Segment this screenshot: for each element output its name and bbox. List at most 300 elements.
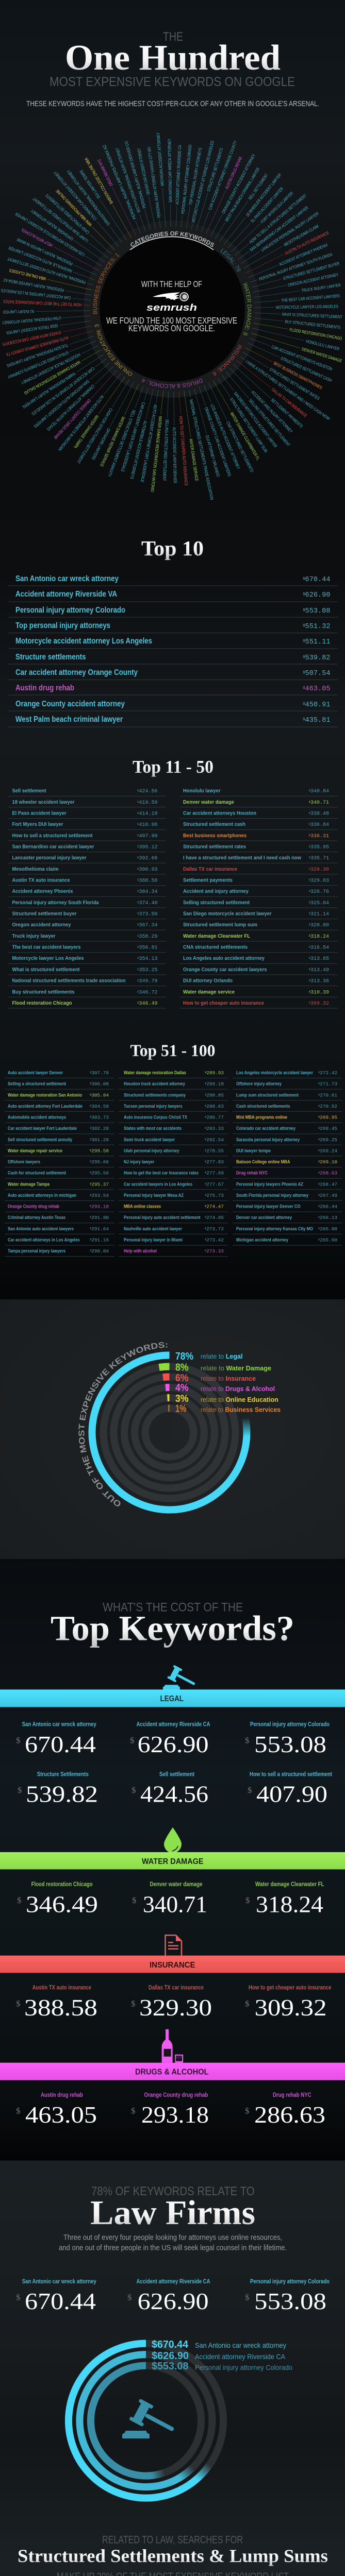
- keywords and prices: $336.84: [309, 822, 329, 828]
- keywords and prices: CNA structured settlements: [183, 944, 248, 951]
- keyword values: Structure Settlements: [37, 1771, 89, 1777]
- keywords and prices: $353.25: [137, 968, 158, 973]
- keywords and prices: Sell structured settlement annuity: [8, 1137, 73, 1143]
- keywords and prices: $291.16: [90, 1238, 109, 1243]
- keywords: Accident attorney Riverside VA: [15, 590, 117, 599]
- keywords and prices: $326.76: [309, 889, 329, 895]
- keywords and prices: $358.29: [137, 934, 158, 940]
- keyword rays: PERSONAL INJURY LAWYERS PHOENIX AZ: [102, 144, 137, 220]
- keyword rays: MBA ONLINE CLASSES: [8, 268, 46, 281]
- prices: $551.11: [303, 638, 330, 646]
- keywords and prices: Buy structured settlements: [12, 989, 75, 995]
- keyword rays: AUSTIN TX AUTO INSURANCE: [284, 230, 330, 256]
- category label: drugs and alcohol: DRUGS & ALCOHOL: 4: [142, 378, 203, 388]
- keywords and prices: South Florida personal injury attorney: [236, 1193, 309, 1198]
- keywords and prices: $354.13: [137, 956, 158, 962]
- keyword rays: MICHIGAN ACCIDENT ATTORNEY: [155, 132, 165, 186]
- keyword values: [16, 1722, 332, 1807]
- found line two: KEYWORDS ON GOOGLE.: [128, 323, 215, 333]
- keywords and prices: How to get cheaper auto insurance: [183, 1000, 264, 1006]
- keywords and prices: $338.48: [309, 811, 329, 817]
- banner text: DRUGS & ALCOHOL: [135, 2068, 208, 2076]
- keywords and prices: Drug rehab NYC: [236, 1171, 268, 1176]
- keywords and prices: $277.69: [205, 1171, 224, 1176]
- keywords and prices: Selling structured settlement: [183, 900, 250, 906]
- keywords and prices: Sell settlement: [12, 788, 46, 794]
- centre text block: [106, 279, 237, 333]
- keyword rays: WATER DAMAGE RESTORATION SAN ANTONIO: [150, 416, 163, 493]
- keyword rays: AUTO ACCIDENT ATTORNEYS IN MICHIGAN: [57, 394, 105, 452]
- keyword rays: CASH STRUCTURED SETTLEMENTS: [44, 193, 90, 235]
- legend: 8%: [175, 1362, 189, 1374]
- keywords and prices: [236, 1070, 337, 1243]
- keyword values: 539.82: [26, 1781, 98, 1807]
- keywords and prices: Structured settlements company: [124, 1092, 186, 1098]
- keyword rays: CNA STRUCTURED SETTLEMENTS: [225, 420, 255, 473]
- icon: water drop: [164, 1827, 182, 1853]
- keywords and prices: Personal injury attorney Kansas City MO: [236, 1226, 313, 1232]
- kicker: WHAT'S THE COST OF THE: [103, 1600, 243, 1615]
- keywords and prices: Houston truck accident attorney: [124, 1081, 186, 1087]
- keyword rays: WATER DAMAGE TAMPA: [73, 414, 100, 450]
- title: Structured Settlements & Lump Sums: [18, 2546, 328, 2566]
- legend: 78%: [175, 1351, 193, 1362]
- banner text: LEGAL: [160, 1694, 184, 1703]
- keyword values: $: [131, 2106, 136, 2115]
- arc: middle fade: [180, 2468, 193, 2478]
- keywords and prices: NJ injury lawyer: [124, 1159, 154, 1165]
- keyword values: $: [245, 2106, 250, 2115]
- keyword values: 329.30: [139, 1994, 212, 2021]
- keyword rays: SELL STRUCTURED SETTLEMENT ANNUITY: [107, 409, 137, 478]
- keyword values: $: [16, 1735, 21, 1745]
- keywords and prices: $291.64: [90, 1226, 109, 1232]
- panel: law firms background: [0, 2161, 345, 2576]
- keywords and prices: Honolulu lawyer: [183, 788, 221, 794]
- legend: relate to Business Services: [201, 1405, 281, 1414]
- keywords and prices: Los Angeles motorcycle accident lawyer: [236, 1070, 313, 1076]
- keywords and prices: $282.54: [205, 1137, 224, 1143]
- keyword rays: DRUG REHAB NYC: [96, 158, 114, 187]
- legend: 4%: [175, 1382, 189, 1394]
- keywords and prices: $268.63: [318, 1171, 337, 1176]
- ring labels: Accident attorney Riverside CA: [195, 2352, 286, 2361]
- keyword values: $: [131, 1998, 136, 2008]
- keyword rays: ACCIDENT ATTORNEY PHOENIX: [278, 242, 328, 267]
- arc: drugs and alcohol: [166, 1384, 169, 1391]
- keywords and prices: I have a structured settlement and I need cash now: [183, 855, 302, 861]
- category: drugs and alcohol: [0, 2029, 345, 2128]
- keywords and prices: Personal injury lawyer Denver CO: [236, 1204, 301, 1210]
- keywords and prices: Settlement payments: [183, 877, 233, 884]
- keyword values: 286.63: [254, 2102, 325, 2128]
- keyword values: Dallas TX car insurance: [149, 1985, 204, 1991]
- keyword rays: OFFSHORE LAWYERS: [91, 427, 111, 461]
- keywords and prices: $407.90: [137, 834, 158, 839]
- kicker: RELATED TO LAW, SEARCHES FOR: [102, 2534, 243, 2546]
- keywords and prices: $289.18: [205, 1081, 224, 1087]
- heading: top 51-100: Top 51 - 100: [130, 1042, 216, 1060]
- stats: law firm keyword values: $: [245, 2293, 250, 2302]
- row dividers: [233, 1078, 342, 1245]
- keywords and prices: $424.56: [137, 789, 158, 794]
- keywords and prices: $269.45: [318, 1126, 337, 1131]
- keywords and prices: $269.25: [318, 1137, 337, 1143]
- grey rings: [69, 2344, 223, 2498]
- keywords and prices: $336.31: [309, 834, 329, 839]
- black centre circle: [100, 236, 245, 382]
- keyword rays: LANCASTER PERSONAL INJURY LAWYER: [260, 211, 320, 252]
- keyword values: $: [130, 1735, 135, 1745]
- keywords and prices: Best business smartphones: [183, 833, 247, 839]
- prices: $450.91: [303, 701, 330, 709]
- keywords and prices: $269.95: [318, 1115, 337, 1120]
- arc: legal 78%: [92, 1355, 247, 1510]
- keywords and prices: $277.67: [205, 1181, 224, 1187]
- keyword rays: NATIONAL STRUCTURED SETTLEMENTS TRADE ASSOCIATION: [189, 399, 215, 500]
- keywords and prices: $273.72: [205, 1226, 224, 1232]
- stats: law firm keyword values: 670.44: [25, 2288, 96, 2314]
- keywords and prices: $419.59: [137, 800, 158, 806]
- keywords and prices: $306.08: [90, 1081, 109, 1087]
- keywords and prices: Car accident attorneys Houston: [183, 810, 256, 816]
- keyword rays: CRIMINAL ATTORNEY AUSTIN TEXAS: [46, 383, 96, 432]
- keywords and prices: $367.34: [137, 923, 158, 928]
- keywords: Motorcycle accident attorney Los Angeles: [15, 637, 152, 646]
- keywords and prices: Cash for structured settlement: [8, 1171, 67, 1176]
- keywords: Personal injury attorney Colorado: [15, 606, 125, 615]
- keywords and prices: $390.93: [137, 867, 158, 873]
- ring labels: $626.90: [152, 2350, 189, 2362]
- keywords and prices: $283.33: [205, 1126, 224, 1131]
- keywords and prices: $293.54: [90, 1193, 109, 1198]
- keyword rays: MESOTHELIOMA CLAIM: [283, 224, 319, 247]
- keywords and prices: Auto accident attorney Fort Lauderdale: [8, 1104, 83, 1109]
- keywords and prices: $313.36: [309, 978, 329, 985]
- keyword values: 670.44: [25, 1731, 96, 1757]
- keywords and prices: DUI attorney Orlando: [183, 978, 233, 984]
- keywords and prices: $313.85: [309, 956, 329, 962]
- table: top 10: [8, 574, 338, 727]
- prices: $670.44: [303, 576, 330, 584]
- prices: $463.05: [303, 685, 330, 693]
- keywords and prices: [12, 788, 158, 1007]
- keywords and prices: $384.34: [137, 889, 158, 895]
- keyword rays: HOW TO GET CHEAPER AUTO INSURANCE: [178, 416, 189, 486]
- keyword rays: AUTOMOBILE ACCIDENT ATTORNEYS: [129, 420, 148, 480]
- ring labels: $670.44: [152, 2339, 189, 2350]
- keywords and prices: San Bernardino car accident lawyer: [12, 844, 94, 850]
- keywords and prices: Utah personal injury attorney: [124, 1148, 179, 1154]
- keywords and prices: $273.42: [205, 1238, 224, 1243]
- keywords and prices: $277.83: [205, 1159, 224, 1165]
- keywords and prices: $313.49: [309, 968, 329, 973]
- icon: gavel: [163, 1665, 199, 1691]
- keywords and prices: $309.32: [309, 1001, 329, 1007]
- keyword rays: ORANGE COUNTY DRUG REHAB: [53, 398, 92, 440]
- keyword values: $: [16, 2106, 21, 2115]
- stats: law firm keyword values: 626.90: [138, 2288, 209, 2314]
- keywords and prices: $414.18: [137, 811, 158, 817]
- keyword rays: DALLAS TX CAR INSURANCE: [271, 387, 308, 418]
- keywords and prices: Water damage restoration San Antonio: [8, 1092, 82, 1098]
- keywords and prices: Personal injury lawyers Phoenix AZ: [236, 1181, 303, 1187]
- keyword rays: MINI MBA PROGRAMS ONLINE: [55, 188, 93, 227]
- panel: top keywords cost background: [0, 1559, 345, 2161]
- legend: 6%: [175, 1372, 189, 1384]
- keyword rays: HELP WITH ALCOHOL: [20, 227, 54, 248]
- keyword values: $: [245, 1895, 250, 1905]
- keyword rays: COLORADO CAR ACCIDENT ATTORNEY: [53, 170, 97, 222]
- banner: water damage: [0, 1852, 345, 1869]
- keywords and prices: Car accident lawyers in Los Angeles: [124, 1181, 192, 1187]
- keywords and prices: $289.93: [205, 1070, 224, 1076]
- keywords and prices: Help with alcohol: [124, 1248, 157, 1254]
- keywords and prices: El Paso accident lawyer: [12, 810, 66, 816]
- keywords and prices: Auto insurance Corpus Christi TX: [124, 1115, 187, 1120]
- table: top 11-50 right column: [179, 788, 338, 1008]
- keyword values: Sell settlement: [159, 1771, 194, 1777]
- keywords and prices: Tampa personal injury lawyers: [8, 1248, 65, 1254]
- prices: $553.08: [303, 607, 330, 615]
- row dividers: [8, 586, 338, 727]
- keywords and prices: $272.42: [318, 1070, 337, 1076]
- keywords and prices: $325.04: [309, 901, 329, 906]
- keywords and prices: $329.03: [309, 878, 329, 884]
- keyword rays: EL PASO ACCIDENT LAWYER: [250, 186, 284, 224]
- keywords and prices: Cash structured settlements: [236, 1104, 290, 1109]
- category: legal: [0, 1665, 345, 1807]
- keywords and prices: Water damage service: [183, 989, 235, 995]
- keywords and prices: Sarasota personal injury attorney: [236, 1137, 300, 1143]
- text block: law firms paragraph: and one out of three people in the US will seek legal counsel in their lifetime.: [59, 2243, 287, 2252]
- keywords and prices: Lump sum structured settlement: [236, 1092, 299, 1098]
- keywords and prices: $288.85: [205, 1092, 224, 1098]
- keyword rays: SAN ANTONIO AUTO ACCIDENT LAWYERS: [32, 379, 91, 429]
- keyword values: 463.05: [25, 2102, 97, 2128]
- keyword rays: TAMPA PERSONAL INJURY LAWYERS: [21, 371, 77, 410]
- category label: legal: LEGAL: 78: [221, 248, 241, 272]
- keyword rays: [1, 132, 343, 500]
- keywords and prices: Denver water damage: [183, 799, 234, 805]
- keywords and prices: $270.52: [318, 1104, 337, 1109]
- keywords and prices: $295.66: [90, 1159, 109, 1165]
- text block: law firms paragraph: [59, 2233, 287, 2252]
- keywords and prices: $274.47: [205, 1204, 224, 1210]
- keyword values: 293.18: [141, 2102, 209, 2128]
- keywords and prices: Personal injury lawyer in Miami: [124, 1238, 183, 1243]
- legend: relate to Drugs & Alcohol: [201, 1385, 275, 1393]
- keywords and prices: $335.71: [309, 856, 329, 861]
- keywords and prices: Car accident attorneys in Los Angeles: [8, 1238, 79, 1243]
- keywords and prices: $410.96: [137, 822, 158, 828]
- table: top 11-50 left column: [8, 788, 166, 1008]
- keywords and prices: States with most car accidents: [124, 1126, 182, 1131]
- keyword rays: OFFSHORE INJURY ATTORNEY: [29, 208, 74, 242]
- keyword values: Water damage Clearwater FL: [255, 1882, 324, 1888]
- keywords and prices: National structured settlements trade association: [12, 978, 126, 984]
- keyword values: $: [245, 1735, 250, 1745]
- keyword values: 346.49: [26, 1891, 98, 1918]
- keywords: Top personal injury attorneys: [15, 621, 110, 630]
- keyword rays: WEST PALM BEACH CRIMINAL LAWYER: [224, 166, 261, 223]
- keywords and prices: Structured settlement buyer: [12, 911, 76, 917]
- arc: inner fade: [152, 2472, 165, 2476]
- keywords and prices: Orange County car accident lawyers: [183, 967, 267, 973]
- keywords and prices: 18 wheeler accident lawyer: [12, 799, 74, 805]
- keyword rays: BABSON COLLEGE ONLINE MBA: [84, 157, 114, 205]
- keyword rays: SELLING STRUCTURED SETTLEMENT: [248, 398, 291, 447]
- found line one: WE FOUND THE 100 MOST EXPENSIVE: [106, 315, 237, 326]
- keywords: San Antonio car wreck attorney: [15, 574, 119, 583]
- stats: law firm keyword values: San Antonio car wreck attorney: [22, 2279, 96, 2285]
- keywords and prices: $320.80: [309, 923, 329, 928]
- legend: 3%: [175, 1393, 189, 1404]
- keyword values: [16, 1985, 331, 2021]
- keywords and prices: $349.79: [137, 978, 158, 985]
- keywords and prices: $268.47: [318, 1181, 337, 1187]
- keyword rays: PERSONAL INJURY ATTORNEY COLORADO: [180, 144, 193, 214]
- keyword values: $: [17, 1895, 22, 1905]
- keywords and prices: Accident attorney Phoenix: [12, 888, 73, 894]
- arc: outer: [69, 2344, 196, 2498]
- keyword values: Austin TX auto insurance: [32, 1985, 91, 1991]
- heading: top 11-50: Top 11 - 50: [133, 757, 213, 777]
- keywords and prices: $305.84: [90, 1092, 109, 1098]
- keyword values: 626.90: [138, 1731, 209, 1757]
- keywords and prices: Denver car accident attorney: [236, 1215, 292, 1221]
- keywords and prices: Car accident lawyer Fort Lauderdale: [8, 1126, 77, 1131]
- keyword values: [17, 1882, 324, 1918]
- arc: outer fade: [196, 2465, 209, 2479]
- heading: The One Hundred: [26, 30, 319, 108]
- keywords and prices: $269.24: [318, 1148, 337, 1154]
- keywords and prices: Auto accident attorneys in michigan: [8, 1193, 76, 1198]
- keyword rays: BEST BUSINESS SMARTPHONES: [273, 361, 323, 391]
- keywords and prices: [124, 1070, 224, 1254]
- keyword rays: SARASOTA PERSONAL INJURY ATTORNEY: [65, 169, 111, 227]
- keywords and prices: Motorcycle lawyer Los Angeles: [12, 955, 84, 961]
- category: water damage: [0, 1827, 345, 1918]
- keyword rays: WATER DAMAGE RESTORATION DALLAS: [23, 360, 81, 396]
- keywords and prices: What is structured settlement: [12, 967, 80, 973]
- legend: [175, 1351, 281, 1415]
- keyword values: 407.90: [256, 1781, 327, 1807]
- keywords and prices: Mesothelioma claim: [12, 866, 59, 872]
- keyword rays: CAR ACCIDENT ATTORNEYS IN LOS ANGELES: [30, 366, 95, 417]
- keyword rays: STRUCTURED SETTLEMENT RATES: [269, 366, 321, 401]
- keywords and prices: Personal injury attorney South Florida: [12, 900, 99, 906]
- keywords and prices: $303.73: [90, 1115, 109, 1120]
- table: top 51-100 column one: [5, 1070, 114, 1257]
- keyword rays: PERSONAL INJURY LAWYER IN MIAMI: [16, 237, 74, 267]
- keyword values: Flood restoration Chicago: [31, 1882, 93, 1888]
- prices: $435.81: [303, 717, 330, 724]
- heading: law firms: [90, 2184, 255, 2232]
- keywords and prices: Structured settlement rates: [183, 844, 246, 850]
- stats: law firm keyword values: Accident attorney Riverside CA: [136, 2279, 210, 2285]
- keyword rays: SAN ANTONIO CAR WRECK ATTORNEY: [167, 139, 173, 202]
- keywords and prices: Selling a structured settlement: [8, 1081, 67, 1087]
- keywords and prices: $356.81: [137, 945, 158, 951]
- keyword rays: SELL SETTLEMENT: [247, 173, 269, 201]
- keyword rays: AUTO ACCIDENT ATTORNEY FORT LAUDERDALE: [140, 404, 158, 483]
- table: top 51-100 column three: [233, 1070, 342, 1245]
- keyword rays: ACCIDENT ATTORNEY RIVERSIDE CA: [174, 145, 182, 205]
- keywords and prices: Water damage Clearwater FL: [183, 933, 251, 939]
- arc: legal fade: [245, 1418, 247, 1436]
- keywords and prices: Michigan accident attorney: [236, 1238, 289, 1243]
- keyword values: $: [248, 1785, 252, 1795]
- category label: online education: ONLINE EDUCATION: 3: [95, 324, 132, 376]
- keyword rays: CASH FOR STRUCTURED SETTLEMENT: [76, 407, 114, 464]
- stats: law firm keyword values: [16, 2279, 330, 2314]
- keywords and prices: Offshore lawyers: [8, 1159, 40, 1165]
- stats: law firm keyword values: Personal injury attorney Colorado: [250, 2279, 330, 2285]
- keywords and prices: $265.80: [318, 1226, 337, 1232]
- legend: relate to Insurance: [201, 1375, 256, 1382]
- keywords and prices: San Diego motorcycle accident lawyer: [183, 911, 271, 917]
- chart: category share rings: [78, 1342, 281, 1514]
- keywords: West Palm beach criminal lawyer: [15, 715, 123, 724]
- keywords and prices: Austin TX auto insurance: [12, 877, 70, 884]
- banner: legal: [0, 1689, 345, 1707]
- banner text: WATER DAMAGE: [142, 1857, 204, 1866]
- stats: law firm keyword values: $: [16, 2293, 21, 2302]
- chart: law firm rings: [69, 2339, 292, 2498]
- keywords and prices: $373.50: [137, 911, 158, 918]
- panel: category share section background: [0, 1299, 345, 1559]
- keywords and prices: Water damage Tampa: [8, 1181, 50, 1187]
- banner text: INSURANCE: [150, 1961, 195, 1970]
- keyword rays: STRUCTURED SETTLEMENT LUMP SUM: [229, 397, 269, 453]
- keywords and prices: Oregon accident attorney: [12, 922, 71, 928]
- keyword rays: CAR ACCIDENT LAWYER FORT LAUDERDALE: [120, 401, 146, 472]
- keywords and prices: Auto accident lawyer Denver: [8, 1070, 63, 1076]
- keyword values: Austin drug rehab: [41, 2092, 83, 2098]
- keyword values: $: [245, 1998, 250, 2008]
- arc: inner: [91, 2366, 152, 2476]
- category label: water damage: WATER DAMAGE: 8: [243, 282, 252, 336]
- keywords and prices: $266.13: [318, 1215, 337, 1221]
- keyword values: Orange County drug rehab: [144, 2092, 208, 2098]
- keywords and prices: Accident and injury attorney: [183, 888, 249, 894]
- legend: relate to Legal: [201, 1352, 242, 1360]
- keywords and prices: $340.71: [309, 800, 329, 806]
- keyword rays: DUI ATTORNEY ORLANDO: [205, 435, 221, 478]
- keywords and prices: $307.78: [90, 1070, 109, 1076]
- keyword rays: DENVER CAR ACCIDENT ATTORNEY: [136, 147, 151, 195]
- keywords and prices: Structured settlement lump sum: [183, 922, 257, 928]
- keyword rays: ORANGE COUNTY ACCIDENT ATTORNEY: [221, 153, 256, 215]
- keyword values: 553.08: [254, 1731, 326, 1757]
- keywords and prices: $274.05: [205, 1215, 224, 1221]
- keyword rays: ACCIDENT AND INJURY ATTORNEY: [250, 389, 294, 434]
- keywords and prices: $346.72: [137, 990, 158, 995]
- category label: business services: BUSINESS SERVICES: 1: [93, 253, 120, 314]
- keywords and prices: $271.73: [318, 1081, 337, 1087]
- keyword rays: TOP PERSONAL INJURY ATTORNEYS: [188, 147, 203, 206]
- title: Law Firms: [90, 2194, 255, 2232]
- keywords and prices: Structured settlement cash: [183, 821, 245, 827]
- keyword values: San Antonio car wreck attorney: [22, 1722, 96, 1728]
- keywords and prices: $310.39: [309, 990, 329, 995]
- keywords and prices: Personal injury lawyer Mesa AZ: [124, 1193, 184, 1198]
- keywords and prices: $273.33: [205, 1248, 224, 1254]
- prices: $626.90: [303, 591, 330, 599]
- keywords and prices: The best car accident lawyers: [12, 944, 81, 951]
- keywords and prices: $392.66: [137, 856, 158, 861]
